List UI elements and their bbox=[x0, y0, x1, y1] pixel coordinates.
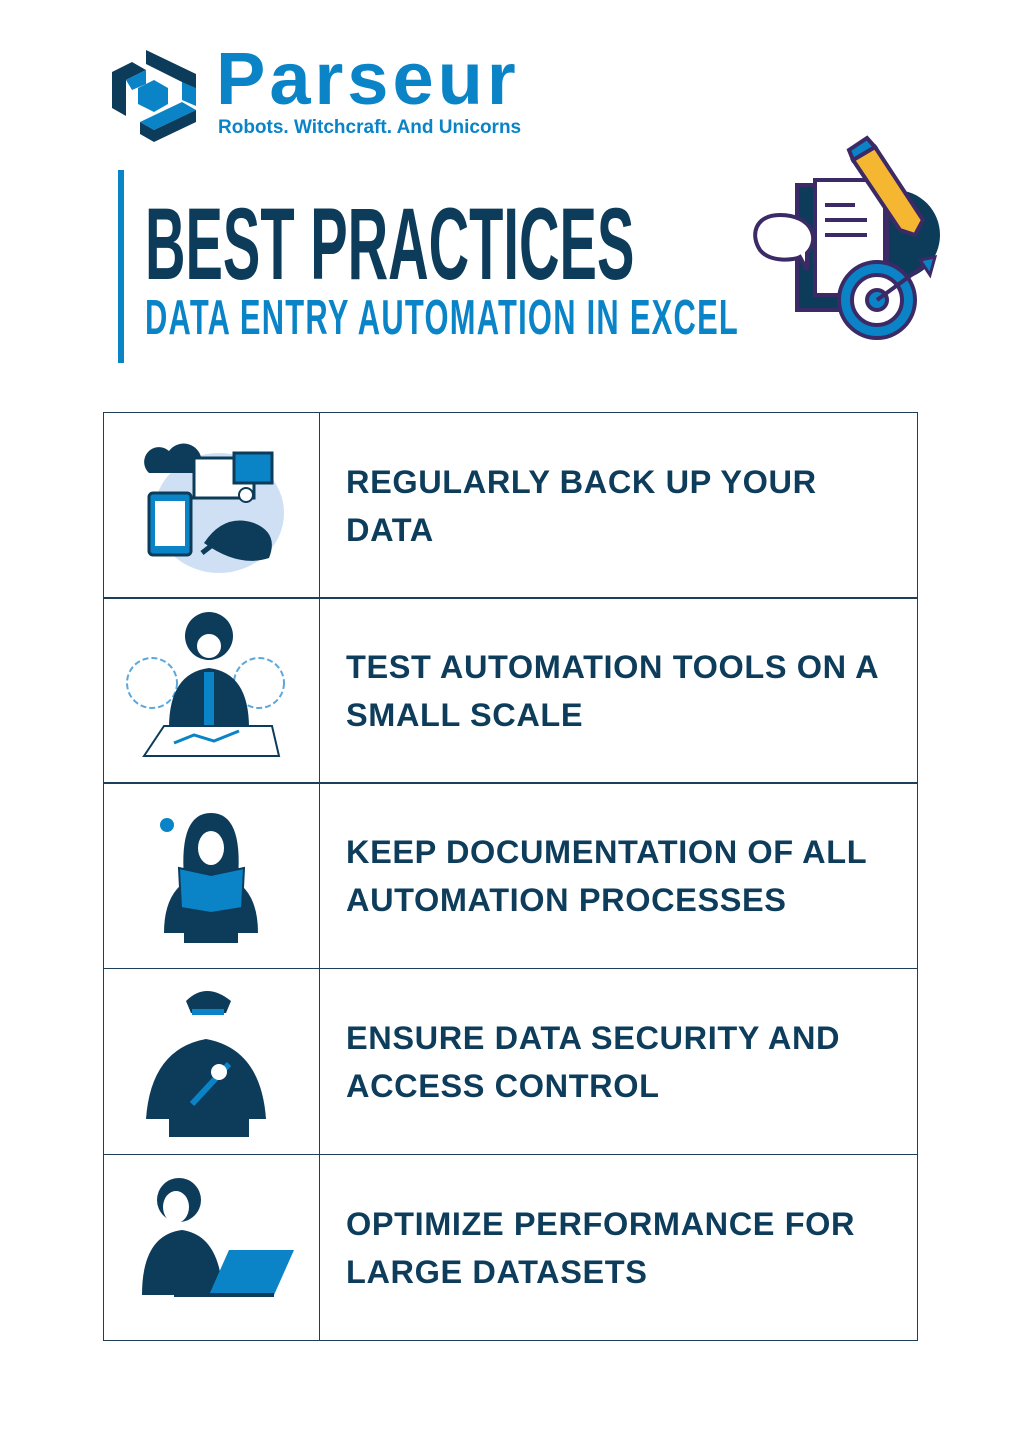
header accent bar bbox=[118, 170, 124, 363]
row 1 bbox=[103, 412, 918, 599]
icon: document target pencil bbox=[753, 135, 940, 340]
icon: woman with laptop bbox=[104, 1155, 320, 1340]
tagline: Robots. Witchcraft. And Unicorns bbox=[218, 117, 521, 138]
row 5 bbox=[103, 1154, 918, 1341]
icon: woman reading bbox=[104, 783, 320, 968]
icon: security officer bbox=[104, 969, 320, 1154]
subtitle: DATA ENTRY AUTOMATION IN EXCEL bbox=[145, 291, 739, 345]
brand name: Parseur bbox=[216, 37, 520, 120]
icon: parseur cube bbox=[112, 50, 196, 142]
title: BEST PRACTICES bbox=[145, 187, 634, 301]
row 3 bbox=[103, 782, 918, 969]
text: KEEP DOCUMENTATION OF ALL AUTOMATION PROCESSES bbox=[346, 834, 867, 918]
icon: data backup bbox=[104, 413, 320, 598]
text: REGULARLY BACK UP YOUR DATA bbox=[346, 464, 817, 548]
text: OPTIMIZE PERFORMANCE FOR LARGE DATASETS bbox=[346, 1206, 855, 1290]
logo bbox=[112, 37, 521, 142]
row 2 bbox=[103, 597, 918, 784]
icon: engineer with gears bbox=[104, 598, 320, 783]
text: ENSURE DATA SECURITY AND ACCESS CONTROL bbox=[346, 1020, 840, 1104]
row 4 bbox=[103, 968, 918, 1155]
text: TEST AUTOMATION TOOLS ON A SMALL SCALE bbox=[346, 648, 878, 732]
